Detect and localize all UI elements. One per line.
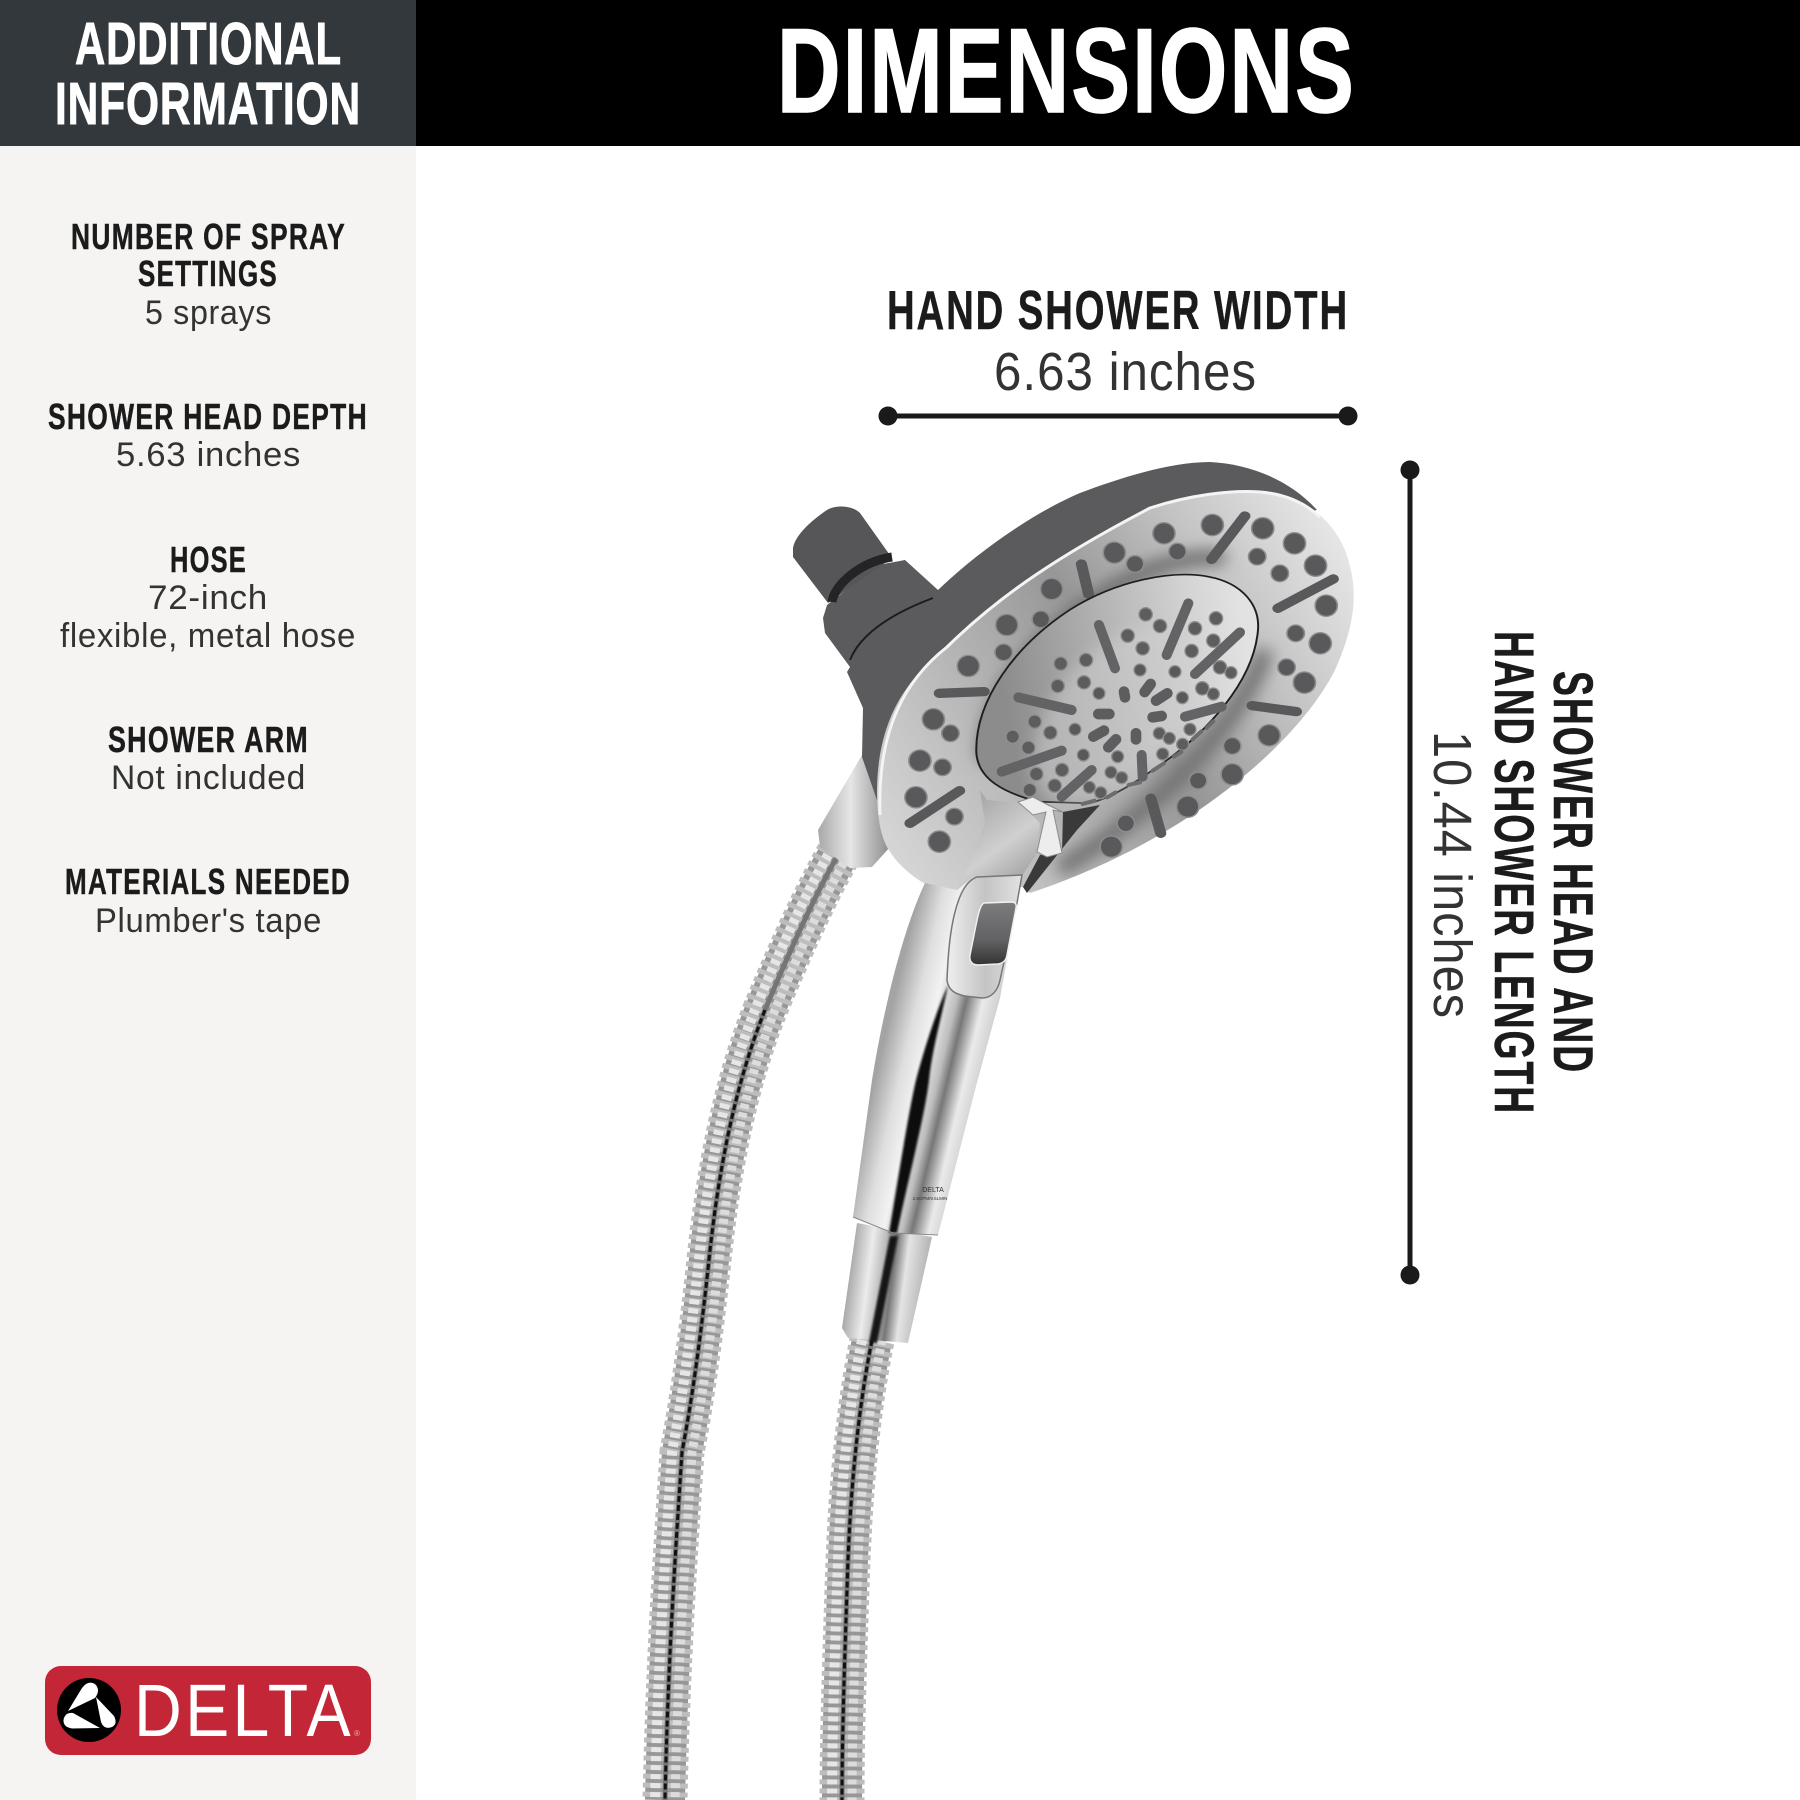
plate shading <box>1002 596 1228 834</box>
sidebar heading <box>55 11 361 137</box>
plate hole jets <box>1069 664 1188 763</box>
shower arm connector cap <box>793 507 892 603</box>
spec: number of spray settings: NUMBER OF SPRAY <box>71 216 346 257</box>
callout: shower head and hand shower length <box>1400 460 1605 1284</box>
spec: number of spray settings: 5 sprays <box>145 294 272 332</box>
swivel and back housing <box>823 462 1317 800</box>
black reflection streak <box>889 985 948 1233</box>
outer ring nozzles <box>905 514 1337 857</box>
sidebar heading: INFORMATION <box>55 71 361 137</box>
sidebar heading: ADDITIONAL <box>75 11 342 77</box>
callout: hand shower width: HAND SHOWER WIDTH <box>887 279 1349 341</box>
hose bracket <box>818 755 890 868</box>
hand shower handle <box>842 875 1022 1343</box>
trigger clip <box>1018 797 1063 857</box>
callout: shower head and hand shower length: SHOWER HEAD AND <box>1542 671 1605 1074</box>
length measure line <box>1400 460 1420 1284</box>
spec: number of spray settings <box>71 216 346 332</box>
dimensions header bar <box>416 0 1800 146</box>
spec: number of spray settings: SETTINGS <box>138 253 278 294</box>
logo: Delta: DELTA <box>134 1669 354 1752</box>
inner plate nozzles <box>1006 608 1237 799</box>
callout: shower head and hand shower length: HAND SHOWER LENGTH <box>1483 631 1546 1115</box>
spec: hose: flexible, metal hose <box>60 617 356 655</box>
seam <box>853 1217 938 1235</box>
handle marking <box>913 1187 947 1201</box>
width measure line <box>878 406 1358 426</box>
ring nozzles and bars <box>905 514 1337 857</box>
plate centre jets <box>1093 684 1167 747</box>
callout: shower head and hand shower length: 10.44 inches <box>1422 731 1482 1019</box>
tail reflection streak <box>869 1236 898 1343</box>
product image: shower head and hand shower <box>655 462 1354 1800</box>
plate edge slots <box>1083 721 1213 804</box>
title: DIMENSIONS <box>777 4 1356 138</box>
ring shading <box>985 557 1265 870</box>
spec: shower arm: SHOWER ARM <box>108 719 309 760</box>
outer ring spray bars <box>910 516 1333 833</box>
spec: materials needed <box>65 861 351 940</box>
handle marking: 2.5GPM/9.5LMIN <box>913 1196 947 1201</box>
rim highlight <box>880 492 1320 815</box>
inner spray plate <box>976 575 1258 803</box>
inner plate spray bars <box>1002 603 1240 797</box>
panel: additional information sidebar <box>0 0 416 1800</box>
connector ring <box>832 557 892 602</box>
face plate outer ring <box>877 492 1354 893</box>
shower head <box>793 462 1354 893</box>
spec: materials needed: MATERIALS NEEDED <box>65 861 351 902</box>
cavity <box>1023 805 1100 893</box>
spec: shower arm <box>108 719 309 797</box>
spec: shower head depth <box>48 396 368 474</box>
sidebar header bar <box>0 0 416 146</box>
callout: hand shower width: 6.63 inches <box>994 342 1257 402</box>
spec: hose: HOSE <box>170 539 247 580</box>
hand shower neck and trigger <box>957 790 1100 893</box>
plate nozzles <box>1002 603 1240 804</box>
spec: hose <box>60 539 356 655</box>
logo: Delta <box>45 1666 371 1755</box>
spec: shower head depth: SHOWER HEAD DEPTH <box>48 396 368 437</box>
hose: left <box>655 855 848 1800</box>
spec: shower head depth: 5.63 inches <box>116 436 301 474</box>
callout: hand shower width <box>878 279 1358 426</box>
neck <box>957 790 1040 890</box>
spec: shower arm: Not included <box>111 759 306 797</box>
spray button <box>970 902 1016 965</box>
handle tail <box>842 1223 932 1343</box>
logo: Delta: ® <box>354 1729 360 1738</box>
spec: hose: 72-inch <box>148 579 268 617</box>
swivel seam <box>850 598 933 660</box>
hose: right <box>832 1340 882 1800</box>
spray button surround <box>947 875 1022 998</box>
spec: materials needed: Plumber's tape <box>95 902 322 940</box>
handle body <box>853 875 1022 1235</box>
handle marking: DELTA <box>922 1187 944 1194</box>
